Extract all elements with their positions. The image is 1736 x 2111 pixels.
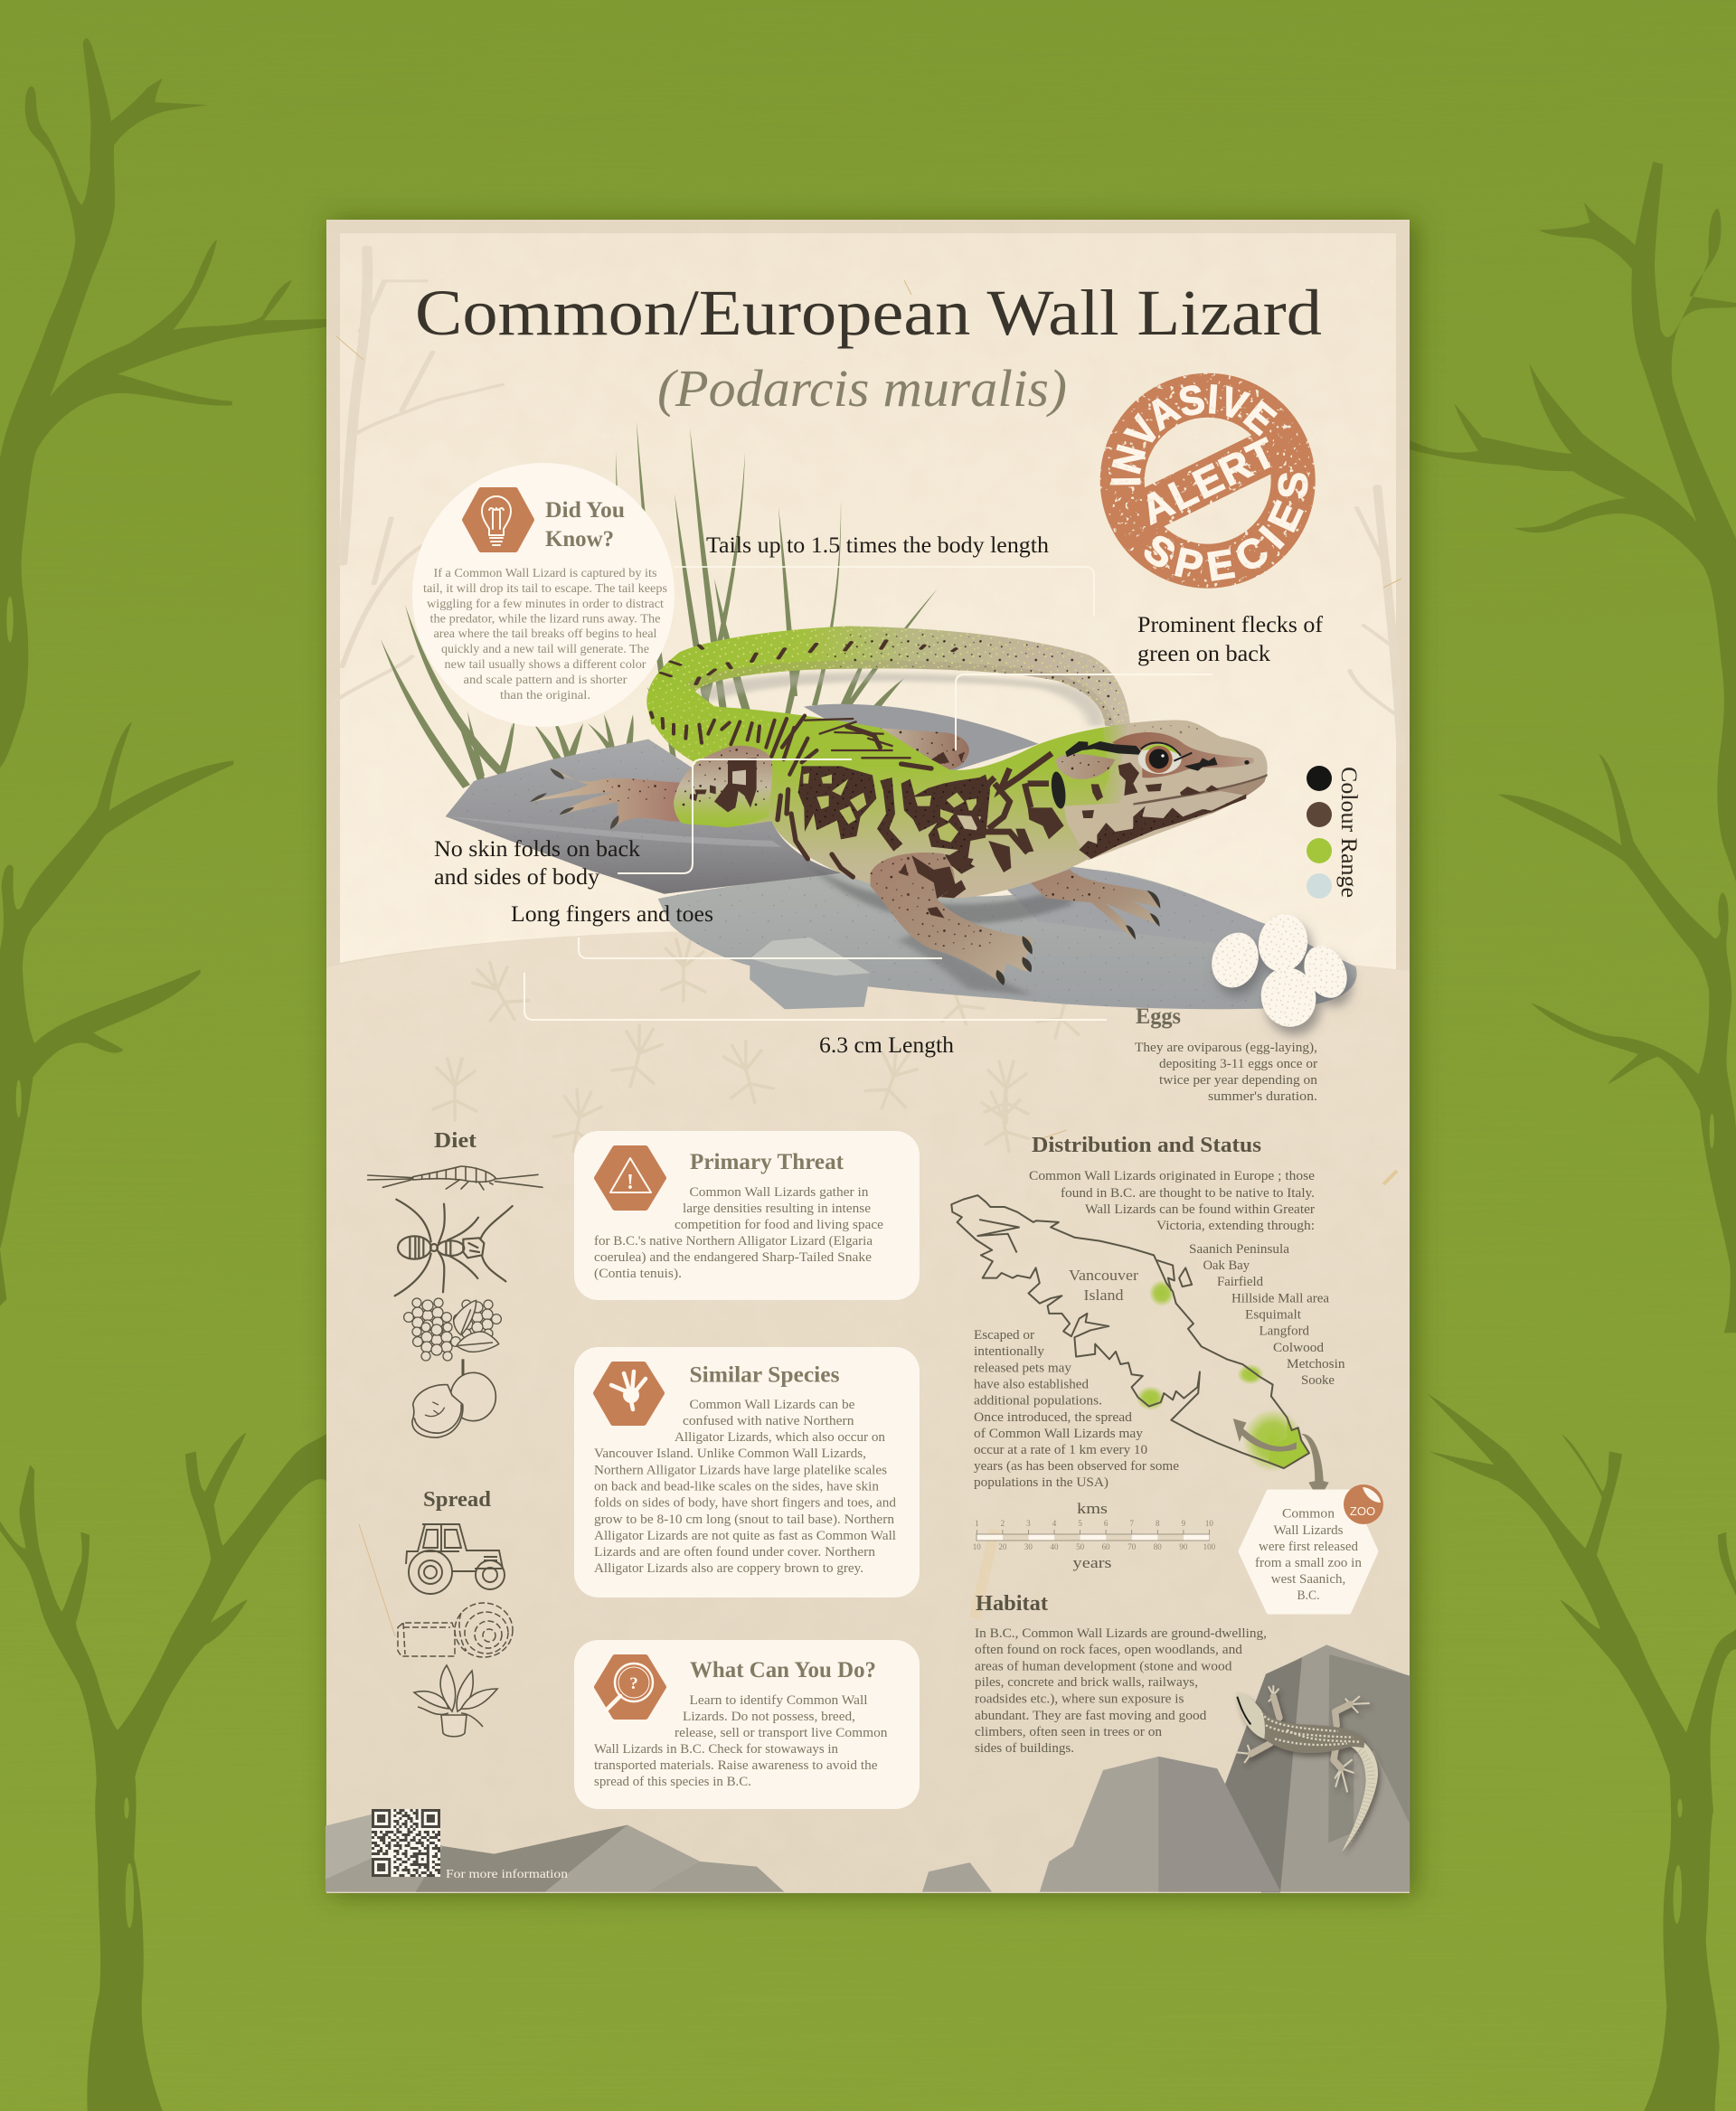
back reticulated pattern and thigh [651,712,990,877]
escaped pets text: Once introduced, the spread [974,1410,1133,1425]
panel: what can you do: release, sell or transport live Common [675,1726,888,1740]
body text: If a Common Wall Lizard is captured by its [434,566,656,580]
panel: distribution and status: found in B.C. are thought to be native to Italy. [1061,1186,1315,1201]
tail-base dashes [651,712,931,877]
zoo hexagon callout: west Saanich, [1271,1572,1345,1587]
eggs [1204,910,1355,1034]
lizard soft shadows [696,673,1105,995]
panel: habitat: piles, concrete and brick walls, railways, [975,1675,1198,1690]
QR code [372,1809,440,1877]
icon: hay bales [398,1603,513,1657]
place list [1189,1242,1345,1388]
panel: primary threat: competition for food and living space [675,1218,883,1232]
did you know panel: Know? [545,527,614,551]
body text: new tail usually shows a different color [445,657,646,671]
callout: long fingers: Long fingers and toes [511,902,713,927]
scale bar: 40 [1051,1542,1059,1551]
scale bar: 60 [1102,1542,1110,1551]
tail [646,626,1130,726]
near foreleg [871,853,1033,985]
scale bar: 4 [1052,1519,1057,1528]
place list: Hillside Mall area [1231,1291,1330,1305]
panel: primary threat: Common Wall Lizards gather in [689,1185,869,1200]
panel: habitat: climbers, often seen in trees or on [975,1725,1163,1739]
place list: Sooke [1301,1373,1335,1388]
place list: Colwood [1273,1341,1325,1355]
callout: skin folds [434,759,852,890]
place list: Oak Bay [1203,1258,1250,1273]
panel: habitat: sides of buildings. [975,1741,1074,1756]
diet column: Diet [434,1129,476,1153]
icon: berries [404,1298,501,1361]
zoo hexagon callout: B.C. [1297,1588,1320,1603]
did you know panel [412,463,675,727]
body text [423,566,667,702]
callout: length: 6.3 cm Length [819,1033,955,1058]
escaped pets text: years (as has been observed for some [974,1459,1179,1474]
body text: and scale pattern and is shorter [463,673,627,686]
body text: wiggling for a few minutes in order to distract [427,597,664,610]
panel: distribution and status: Distribution and Status [1032,1134,1261,1157]
escaped pets text: populations in the USA) [974,1475,1109,1490]
arrow: spread direction [1233,1418,1297,1451]
icon: zoo badge: ZOO [1350,1504,1375,1518]
icon: magnifier hexagon: ? [629,1674,638,1693]
place list: Metchosin [1287,1357,1345,1371]
zoo hexagon callout: were first released [1259,1540,1359,1554]
escaped pets text: intentionally [974,1344,1045,1359]
callout: green flecks [956,613,1324,750]
panel: distribution and status [951,1134,1345,1571]
icon: zoo badge [1344,1484,1383,1524]
callout: green flecks: green on back [1137,642,1271,666]
scale bar [973,1500,1216,1571]
stamp: invasive species alert: ALERT [1134,429,1282,533]
escaped pets text: have also established [974,1377,1090,1391]
panel: what can you do: Wall Lizards in B.C. Check for stowaways in [594,1742,839,1757]
escaped pets text: released pets may [974,1361,1072,1375]
zoo hexagon callout [1241,1484,1383,1612]
callout: length [524,973,1107,1058]
panel: distribution and status: Victoria, extending through: [1156,1219,1315,1233]
scale bar: 6 [1104,1519,1109,1528]
panel: what can you do: Lizards. Do not possess, breed, [683,1710,855,1724]
scale bar: 5 [1078,1519,1082,1528]
icon: lizard hand hexagon [596,1364,662,1423]
subtitle: (Podarcis muralis) [657,359,1067,418]
escaped pets text: additional populations. [974,1394,1102,1409]
arrow: release site [1301,1434,1329,1500]
panel: primary threat [574,1131,920,1300]
body text: quickly and a new tail will generate. The [441,642,649,655]
eggs text: depositing 3-11 eggs once or [1159,1057,1317,1071]
panel: primary threat: large densities resulting in intense [683,1202,871,1216]
neck reticulation [974,753,1052,853]
jaw band [1079,794,1246,859]
scale bar: 3 [1026,1519,1031,1528]
rocks [446,704,1357,1009]
panel: habitat: roadsides etc.), where sun exposure is [975,1692,1184,1707]
icon: silverfish [368,1166,542,1190]
panel: similar species: Lizards and are often found under cover. Northern [594,1545,876,1560]
QR caption: For more information [446,1867,568,1880]
panel: habitat: abundant. They are fast moving and good [975,1709,1207,1723]
scale bar: 8 [1156,1519,1160,1528]
panel: distribution and status: Common Wall Lizards originated in Europe ; those [1029,1169,1315,1183]
scale bar: 30 [1024,1542,1033,1551]
jaw [1133,774,1268,814]
scale bar: 9 [1182,1519,1186,1528]
panel: similar species: grow to be 8-10 cm long (snout to tail base). Northern [594,1513,895,1527]
panel: primary threat: coerulea) and the endangered Sharp-Tailed Snake [594,1250,872,1265]
colour range legend [1307,766,1361,899]
icon: light bulb hexagon [465,490,532,550]
stamp: invasive species alert: INVASIVE [1111,384,1278,485]
place list: Langford [1259,1324,1310,1338]
zoo hexagon callout: Wall Lizards [1273,1523,1344,1538]
hind foot [530,768,684,829]
panel: habitat: In B.C., Common Wall Lizards are ground-dwelling, [975,1626,1267,1641]
callout: skin folds: No skin folds on back [434,837,641,862]
panel: what can you do: Learn to identify Common Wall [689,1693,868,1708]
panel: similar species: on back and bead-like scales on the sides, have skin [594,1479,880,1494]
rear reticulated mass [798,766,876,839]
faint footprints [433,939,1092,1155]
scale bar: 80 [1154,1542,1162,1551]
colour range legend: Colour Range [1336,767,1361,898]
habitat mountains [922,1645,1410,1892]
scale bar: kms [1077,1500,1108,1517]
panel: primary threat: for B.C.'s native Northern Alligator Lizard (Elgaria [594,1234,873,1249]
panel: distribution and status: Wall Lizards can be found within Greater [1085,1202,1315,1217]
icon: tractor [406,1524,505,1594]
scale bar: 1 [975,1519,979,1528]
scale bar: 10 [973,1542,981,1551]
panel: similar species: Vancouver Island. Unlike Common Wall Lizards, [594,1447,866,1461]
icon: warning hexagon: ! [627,1171,634,1194]
panel: distribution and status: Island [1083,1286,1124,1304]
panel: primary threat: Primary Threat [690,1150,844,1174]
panel: similar species: Alligator Lizards are not quite as fast as Common Wall [594,1529,896,1543]
title: Common/European Wall Lizard [415,277,1322,349]
panel: similar species: Alligator Lizards also are coppery brown to grey. [594,1561,863,1576]
callout: green flecks: Prominent flecks of [1137,613,1324,637]
panel: what can you do: What Can You Do? [690,1658,876,1682]
panel: what can you do [574,1640,920,1809]
stamp: invasive species alert [1099,372,1316,589]
icon: magnifier hexagon [597,1657,664,1717]
scale bar: 90 [1179,1542,1188,1551]
stamp: invasive species alert: SPECIES [1145,473,1308,581]
scale bar: years [1072,1554,1112,1571]
upper light panel [340,233,1396,969]
panel: similar species: folds on sides of body, have short fingers and toes, and [594,1496,897,1511]
eggs text: Eggs [1136,1004,1181,1029]
body [648,693,1191,898]
zoo hexagon callout: Common [1282,1506,1335,1521]
faint tree right [1350,487,1401,764]
callout: tails: Tails up to 1.5 times the body length [706,533,1050,558]
diet column [368,1129,542,1737]
panel: similar species: Alligator Lizards, which also occur on [675,1430,886,1445]
eggs text: They are oviparous (egg-laying), [1135,1041,1317,1055]
escaped pets text: occur at a rate of 1 km every 10 [974,1443,1147,1457]
scale bar: 100 [1203,1542,1216,1551]
small lizard on rock [1236,1686,1378,1852]
panel: similar species [574,1347,920,1597]
spread heading: Spread [423,1488,492,1512]
panel: habitat: Habitat [976,1592,1048,1616]
body text: the predator, while the lizard runs away. The [430,611,661,626]
paper stains [336,280,1401,1636]
scale bar: 7 [1129,1519,1134,1528]
icon: apples [412,1359,495,1437]
body text: than the original. [500,688,590,702]
panel: similar species: Similar Species [689,1363,840,1387]
body text: tail, it will drop its tail to escape. The tail keeps [423,581,667,595]
panel: habitat [975,1592,1267,1756]
lower ground [326,931,1410,1893]
eggs text: twice per year depending on [1159,1073,1318,1088]
panel: habitat: areas of human development (stone and wood [975,1659,1232,1673]
neck and head [934,721,1268,898]
scale bar: 2 [1001,1519,1005,1528]
grass [381,421,938,788]
eggs text: summer's duration. [1208,1089,1317,1104]
panel: what can you do: transported materials. Raise awareness to avoid the [594,1758,878,1773]
place list: Esquimalt [1245,1307,1301,1322]
zoo hexagon callout: from a small zoo in [1255,1556,1363,1570]
neck oval [1050,771,1068,809]
brown crown [1112,732,1254,777]
panel: primary threat: (Contia tenuis). [594,1267,682,1281]
scale bar: 50 [1076,1542,1085,1551]
body text: area where the tail breaks off begins to heal [434,627,657,640]
scale bar: 70 [1127,1542,1137,1551]
panel: similar species: Northern Alligator Lizards have large platelike scales [594,1463,887,1477]
panel: similar species: confused with native Northern [683,1414,854,1428]
background tree silhouettes right [1410,162,1736,2111]
place list: Fairfield [1217,1275,1264,1289]
eye [1138,743,1192,774]
map of Vancouver Island [951,1195,1309,1472]
far hind leg knob [877,728,969,769]
callout: tails [674,533,1094,617]
small rock [750,938,871,1009]
place list: Saanich Peninsula [1189,1242,1290,1257]
background tree silhouettes left [0,38,326,2111]
escaped pets text: Escaped or [974,1328,1034,1343]
icon: ant [395,1200,513,1296]
callout: skin folds: and sides of body [434,865,600,890]
escaped pets text: of Common Wall Lizards may [974,1427,1144,1441]
panel: habitat: often found on rock faces, open woodlands, and [975,1643,1243,1657]
scale bar: 10 [1205,1519,1213,1528]
map label: Vancouver [1069,1267,1138,1284]
scale bar: 20 [998,1542,1007,1551]
cheek patch [1056,754,1115,779]
faint tree left [334,248,502,702]
front reticulated mass [901,775,990,874]
callout: long fingers [511,902,942,958]
panel: what can you do: spread of this species in B.C. [594,1775,751,1789]
eggs text [1135,1004,1318,1104]
middle stripe [877,777,902,852]
far foreleg [1031,870,1160,939]
illustration: lizard on rocks with eggs [446,626,1357,1034]
escaped pets text [974,1328,1179,1490]
poster sheet [326,220,1410,1893]
icon: warning hexagon [597,1148,664,1208]
icon: potted plant [414,1665,497,1737]
bottom left mountains [326,1814,784,1892]
brow band [1065,741,1144,757]
heading: Did You [545,498,625,523]
panel: similar species: Common Wall Lizards can be [689,1398,855,1412]
